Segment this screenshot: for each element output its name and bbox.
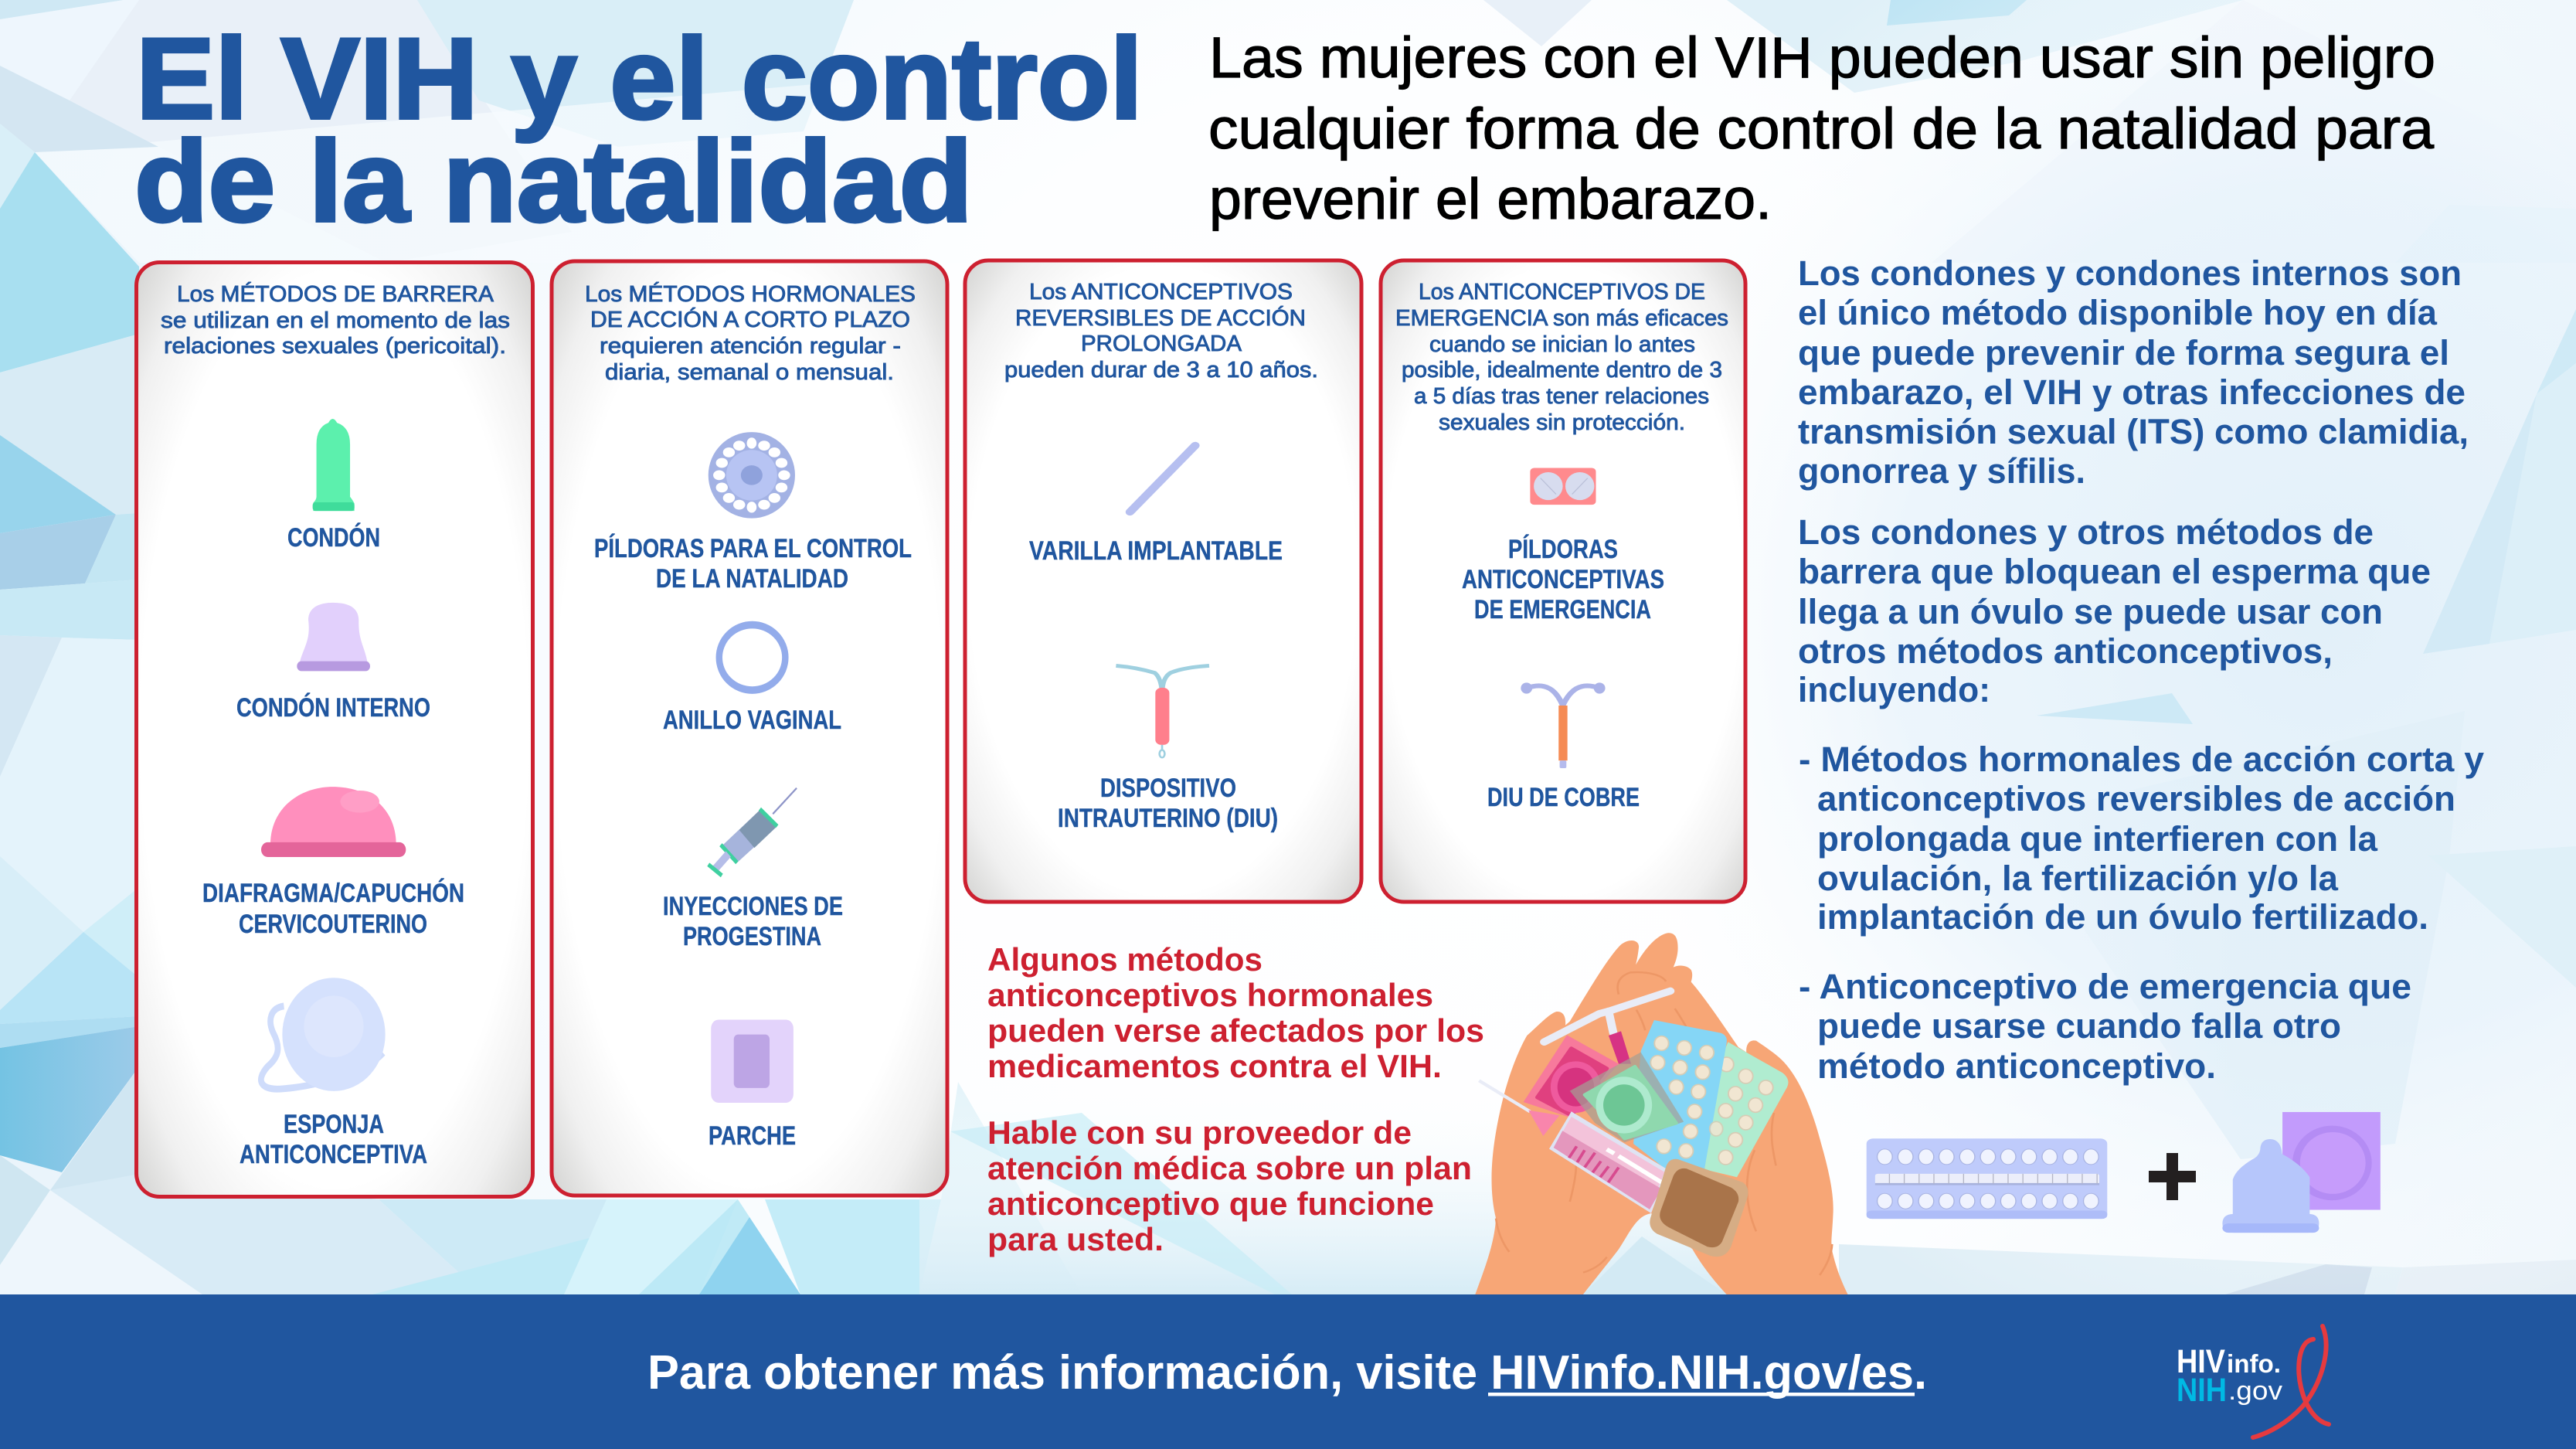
paragraph: condoms only method: Los condones y condones internos son	[1798, 253, 2462, 293]
icon: emergency pills	[1530, 468, 1596, 505]
paragraph: condoms only method	[1798, 253, 2469, 491]
paragraph: combining methods: barrera que bloquean el esperma que	[1798, 552, 2431, 591]
panel heading: long-acting reversible: PROLONGADA	[1081, 332, 1242, 356]
bullet: hormonal methods: prolongada que interfieren con la	[1817, 819, 2378, 859]
label: birth control pills: DE LA NATALIDAD	[656, 564, 848, 594]
panel heading: emergency: Los ANTICONCEPTIVOS DE	[1419, 280, 1705, 304]
bullet: hormonal methods	[1799, 740, 2484, 937]
panel heading: long-acting reversible: REVERSIBLES DE ACCIÓN	[1015, 305, 1306, 331]
bullet: emergency contraceptive: puede usarse cuando falla otro	[1817, 1006, 2341, 1046]
bullet: hormonal methods: anticonceptivos reversibles de acción	[1817, 779, 2455, 818]
panel: short-acting hormonal methods	[552, 261, 947, 1196]
icon: white IUD	[1544, 991, 1670, 1064]
title: de la natalidad	[134, 117, 973, 246]
icon: sponge	[261, 978, 386, 1091]
icon: vaginal ring	[719, 625, 785, 690]
icon: red ribbon	[2253, 1326, 2329, 1437]
footer text with link: Para obtener más información, visite HIVinfo.NIH.gov/es.	[647, 1346, 1927, 1400]
illustration: hands holding contraceptives	[1475, 933, 1848, 1294]
logo: HIVinfo.NIH.gov: info.	[2227, 1349, 2281, 1378]
panel heading: short-acting hormonal	[585, 281, 916, 385]
bullet: hormonal methods: implantación de un óvulo fertilizado.	[1817, 897, 2428, 937]
label: sponge	[240, 1110, 427, 1169]
paragraph: condoms only method: transmisión sexual (ITS) como clamidia,	[1798, 412, 2469, 451]
panel heading: barrier methods: Los MÉTODOS DE BARRERA	[177, 281, 494, 307]
bullet: emergency contraceptive: - Anticonceptivo de emergencia que	[1799, 967, 2411, 1006]
paragraph: combining methods: llega a un óvulo se puede usar con	[1798, 592, 2383, 631]
icon: blue blister pack	[1633, 1020, 1727, 1169]
subtitle: prevenir el embarazo.	[1209, 167, 1772, 231]
panel heading: emergency: cuando se inician lo antes	[1429, 332, 1695, 357]
panel heading: emergency: EMERGENCIA son más eficaces	[1395, 306, 1728, 331]
label: condom: CONDÓN	[287, 523, 380, 553]
callout: red warning text: medicamentos contra el VIH.	[987, 1048, 1442, 1084]
hands	[1475, 933, 1848, 1294]
label: patch: PARCHE	[709, 1121, 796, 1151]
panel heading: short-acting hormonal: Los MÉTODOS HORMONALES	[585, 281, 916, 307]
icon: implant rod	[1130, 445, 1195, 512]
panel heading: short-acting hormonal: requieren atención regular -	[600, 334, 901, 359]
bullet: emergency contraceptive: método anticonceptivo.	[1817, 1046, 2216, 1086]
logo: HIVinfo.NIH.gov	[2177, 1343, 2282, 1409]
callout: red warning text: Algunos métodos	[987, 941, 1263, 978]
label: emergency pills: ANTICONCEPTIVAS	[1462, 565, 1664, 594]
bullet: hormonal methods: ovulación, la fertilización y/o la	[1817, 859, 2339, 898]
label: emergency pills	[1462, 535, 1664, 624]
label: emergency pills: DE EMERGENCIA	[1474, 595, 1651, 624]
subtitle: Las mujeres con el VIH pueden usar sin peligro	[1209, 26, 2435, 90]
icon: brown patch	[1650, 1159, 1748, 1257]
icon: green condom	[313, 419, 355, 511]
label: IUD: DISPOSITIVO	[1100, 774, 1236, 803]
icon: green blister pack	[1704, 1042, 1788, 1177]
bullet: emergency contraceptive	[1799, 967, 2411, 1086]
bullet: hormonal methods: - Métodos hormonales de acción corta y	[1799, 740, 2484, 779]
icon: birth control pills dial	[709, 432, 795, 519]
icon: pill blister strip	[1867, 1138, 2107, 1219]
logo: HIVinfo.NIH.gov: .gov	[2228, 1376, 2282, 1406]
callout: red warning text: para usted.	[987, 1221, 1164, 1257]
panel heading: long-acting reversible	[1004, 280, 1318, 383]
panel heading: barrier methods: relaciones sexuales (pericoital).	[164, 334, 506, 359]
logo: HIVinfo.NIH.gov: HIV	[2177, 1343, 2225, 1380]
callout: red warning text: pueden verse afectados por los	[987, 1012, 1484, 1049]
icon: green condom wrapper	[1570, 1053, 1684, 1142]
icon: pink syringe	[1479, 1080, 1667, 1213]
panel heading: long-acting reversible: pueden durar de 3 a 10 años.	[1004, 358, 1318, 383]
panel: long-acting reversible contraceptives	[965, 260, 1361, 902]
panel heading: emergency: sexuales sin protección.	[1439, 410, 1685, 435]
icon: hormonal IUD	[1116, 665, 1209, 757]
title: El VIH y el control	[136, 14, 1143, 143]
label: IUD: INTRAUTERINO (DIU)	[1058, 804, 1278, 833]
panel heading: emergency: a 5 días tras tener relaciones	[1414, 384, 1709, 409]
label: progestin injections: PROGESTINA	[683, 922, 821, 951]
label: implant rod: VARILLA IMPLANTABLE	[1029, 536, 1283, 566]
title	[134, 14, 1143, 246]
callout: red warning text: atención médica sobre un plan	[987, 1150, 1472, 1186]
callout: red warning text: anticonceptivos hormonales	[987, 977, 1433, 1013]
label: birth control pills: PÍLDORAS PARA EL CONTROL	[594, 534, 912, 563]
panel heading: barrier methods	[161, 281, 510, 359]
label: internal condom: CONDÓN INTERNO	[236, 693, 430, 723]
paragraph: combining methods	[1798, 512, 2431, 709]
paragraph: condoms only method: embarazo, el VIH y otras infecciones de	[1798, 372, 2466, 412]
footer band	[0, 1294, 2576, 1449]
label: birth control pills	[594, 534, 912, 594]
panel: emergency contraceptives	[1381, 260, 1745, 902]
paragraph: combining methods: incluyendo:	[1798, 670, 1990, 709]
paragraph: condoms only method: el único método disponible hoy en día	[1798, 293, 2438, 332]
label: copper IUD: DIU DE COBRE	[1487, 783, 1640, 812]
panel heading: short-acting hormonal: DE ACCIÓN A CORTO PLAZO	[590, 307, 910, 332]
icon: pink condom wrapper	[1524, 1035, 1619, 1118]
label: IUD	[1058, 774, 1278, 833]
callout: red warning text: anticonceptivo que funcione	[987, 1185, 1434, 1222]
paragraph: condoms only method: gonorrea y sífilis.	[1798, 451, 2085, 491]
text block: right column about condoms	[1798, 253, 2484, 1086]
panel heading: long-acting reversible: Los ANTICONCEPTIVOS	[1029, 280, 1293, 304]
label: diaphragm: CERVICOUTERINO	[239, 910, 427, 939]
label: vaginal ring: ANILLO VAGINAL	[663, 706, 841, 735]
subtitle	[1208, 26, 2435, 231]
icon: patch	[711, 1019, 794, 1103]
icon: diaphragm	[261, 787, 406, 857]
callout: red warning text	[987, 941, 1484, 1257]
subtitle: cualquier forma de control de la natalidad para	[1208, 97, 2435, 161]
label: progestin injections	[663, 892, 843, 951]
label: sponge: ANTICONCEPTIVA	[240, 1140, 427, 1169]
label: emergency pills: PÍLDORAS	[1508, 535, 1618, 564]
label: progestin injections: INYECCIONES DE	[663, 892, 843, 921]
paragraph: combining methods: Los condones y otros métodos de	[1798, 512, 2374, 552]
icon: condom and wrapper	[2222, 1112, 2381, 1233]
logo: HIVinfo.NIH.gov: NIH	[2177, 1372, 2227, 1409]
panel heading: emergency	[1395, 280, 1728, 435]
label: diaphragm: DIAFRAGMA/CAPUCHÓN	[202, 879, 464, 908]
panel heading: barrier methods: se utilizan en el momento de las	[161, 308, 510, 333]
panel: barrier methods	[136, 263, 533, 1196]
icon: plus sign	[2149, 1153, 2196, 1200]
callout: red warning text: Hable con su proveedor de	[987, 1114, 1412, 1151]
paragraph: condoms only method: que puede prevenir de forma segura el	[1798, 333, 2449, 372]
paragraph: combining methods: otros métodos anticonceptivos,	[1798, 631, 2333, 671]
label: diaphragm	[202, 879, 464, 939]
label: sponge: ESPONJA	[284, 1110, 384, 1139]
panel heading: emergency: posible, idealmente dentro de 3	[1402, 358, 1722, 383]
panel heading: short-acting hormonal: diaria, semanal o mensual.	[605, 360, 894, 385]
icon: copper IUD	[1521, 682, 1606, 768]
icon: syringe	[709, 788, 797, 876]
icon: internal condom	[297, 603, 370, 671]
